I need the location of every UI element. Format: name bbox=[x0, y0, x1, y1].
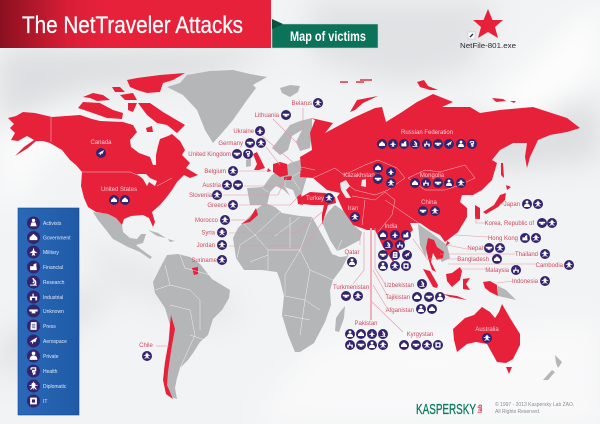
Australia bbox=[453, 304, 520, 363]
marker: Jordan bbox=[197, 220, 324, 250]
marker: Tajikistan: Tajikistan bbox=[385, 295, 410, 301]
marker: Uzbekistan: Uzbekistan bbox=[384, 283, 414, 289]
legend panel: Aerospace bbox=[43, 339, 67, 345]
marker: India: India bbox=[384, 224, 398, 230]
legend panel: Health bbox=[43, 369, 58, 375]
Arctic Canada islands bbox=[78, 73, 185, 133]
marker: China: China bbox=[421, 200, 437, 206]
marker: Slovenia: Slovenia bbox=[189, 193, 213, 199]
Arabia and Iraq bbox=[322, 205, 362, 251]
marker: Austria bbox=[202, 178, 287, 190]
legend panel: Military bbox=[43, 250, 59, 256]
marker: Morocco bbox=[195, 215, 245, 225]
marker: Russian Federation: Russian Federation bbox=[401, 130, 453, 136]
marker: Belarus bbox=[292, 98, 323, 130]
marker: Iran: Iran bbox=[348, 206, 358, 212]
marker: Nepal: Nepal bbox=[467, 246, 483, 252]
legend panel: Industrial bbox=[43, 295, 63, 301]
marker: Turkey: Turkey bbox=[306, 196, 324, 202]
marker: Slovenia bbox=[189, 182, 284, 200]
Canada and United States bbox=[8, 112, 198, 227]
marker: Cambodia: Cambodia bbox=[536, 263, 564, 269]
marker: Ukraine: Ukraine bbox=[233, 129, 255, 135]
marker: Bangladesh bbox=[428, 254, 502, 264]
legend panel: Government bbox=[43, 236, 71, 242]
legend panel bbox=[18, 208, 79, 415]
marker: Greece bbox=[207, 198, 297, 210]
Caspian and Aral seas bbox=[340, 179, 366, 198]
marker: Turkmenistan bbox=[333, 232, 369, 301]
marker: Cambodia bbox=[448, 260, 574, 270]
marker: United Kingdom bbox=[188, 149, 253, 159]
Southeast Asia grey bbox=[418, 224, 516, 300]
marker: Syria bbox=[201, 212, 322, 238]
marker: Japan: Japan bbox=[504, 202, 520, 208]
map of victims ribbon bbox=[272, 19, 378, 48]
legend panel: Unknown bbox=[43, 309, 64, 315]
marker: Morocco: Morocco bbox=[195, 218, 219, 224]
Europe bbox=[247, 160, 310, 205]
map of victims ribbon: Map of victims bbox=[290, 28, 366, 44]
star with file name bbox=[460, 9, 516, 50]
marker: Germany bbox=[218, 138, 280, 165]
Africa bbox=[233, 203, 348, 352]
marker: Qatar bbox=[344, 232, 360, 267]
marker: Kyrgystan: Kyrgystan bbox=[407, 332, 433, 338]
marker: Turkey bbox=[306, 193, 334, 203]
marker: Australia bbox=[475, 327, 499, 343]
Germany, UK and central Europe bbox=[241, 152, 303, 224]
marker: Chile: Chile bbox=[139, 343, 153, 349]
marker: Korea, Republic of: Korea, Republic of bbox=[485, 221, 534, 227]
marker: Hong Kong bbox=[455, 233, 541, 243]
marker: Afganistan bbox=[373, 285, 437, 314]
Arctic Russian islands bbox=[350, 80, 516, 112]
marker: Suriname: Suriname bbox=[191, 258, 218, 264]
marker: Belarus: Belarus bbox=[292, 101, 312, 107]
marker: Malaysia: Malaysia bbox=[485, 268, 510, 274]
Eurasia: Russia, Central Asia, China, India bbox=[300, 94, 580, 262]
marker: Malaysia bbox=[460, 265, 521, 275]
Asian borders bbox=[301, 160, 475, 232]
marker: Greece: Greece bbox=[207, 203, 228, 209]
Greenland bbox=[167, 70, 267, 143]
Madagascar bbox=[335, 306, 345, 332]
marker: Afganistan: Afganistan bbox=[386, 308, 414, 314]
marker: Kyrgystan bbox=[372, 302, 443, 350]
South American borders bbox=[155, 255, 210, 368]
marker: Lithuania bbox=[255, 110, 300, 146]
marker: Suriname bbox=[191, 255, 227, 267]
marker: Mongolia bbox=[410, 173, 466, 188]
marker: Thailand: Thailand bbox=[515, 252, 538, 258]
marker: Kazakhstan bbox=[343, 163, 396, 188]
Kaspersky logo: lab bbox=[478, 404, 484, 413]
legend panel: IT bbox=[43, 399, 47, 405]
African borders bbox=[237, 212, 342, 335]
legend panel: Financial bbox=[43, 265, 63, 271]
star with file name: NetFile-801.exe bbox=[460, 41, 516, 50]
Caribbean bbox=[148, 230, 175, 242]
Turkey, Syria, Jordan bbox=[301, 192, 336, 225]
marker: China bbox=[418, 200, 440, 216]
marker: Bangladesh: Bangladesh bbox=[457, 257, 489, 263]
marker: Jordan: Jordan bbox=[197, 243, 215, 249]
marker: Turkmenistan: Turkmenistan bbox=[333, 285, 369, 291]
Ireland bbox=[246, 158, 251, 167]
Tasmania bbox=[506, 367, 512, 374]
marker: Canada: Canada bbox=[90, 140, 112, 146]
Scandinavia bbox=[272, 118, 312, 155]
marker: Kazakhstan: Kazakhstan bbox=[343, 173, 375, 179]
South America bbox=[153, 254, 230, 399]
New Zealand bbox=[543, 355, 562, 380]
marker: Ukraine bbox=[233, 126, 302, 170]
Chile bbox=[163, 315, 175, 399]
marker: United States bbox=[101, 187, 137, 205]
marker: Belgium bbox=[204, 166, 268, 176]
legend panel: Press bbox=[43, 324, 56, 330]
marker: United Kingdom: United Kingdom bbox=[188, 152, 231, 158]
marker: Japan bbox=[500, 199, 543, 209]
marker: Indonesia bbox=[497, 276, 550, 286]
marker: Germany: Germany bbox=[218, 141, 243, 147]
marker: Canada bbox=[90, 140, 112, 158]
marker: Tajikistan bbox=[373, 270, 445, 302]
copyright: © 1997 - 2013 Kaspersky Lab ZAO. bbox=[495, 402, 574, 408]
legend panel: Private bbox=[43, 354, 59, 360]
title banner: The NetTraveler Attacks bbox=[22, 12, 243, 39]
legend panel: Activists bbox=[43, 221, 62, 227]
Indonesia islands bbox=[423, 267, 498, 300]
world map bbox=[8, 70, 580, 399]
Great Lakes bbox=[137, 174, 157, 186]
marker: India bbox=[378, 224, 412, 271]
copyright: All Rights Reserved. bbox=[495, 409, 540, 415]
title banner bbox=[0, 0, 271, 48]
Mexico and Central America bbox=[93, 212, 152, 259]
legend panel: Research bbox=[43, 280, 65, 286]
Japan and Korea bbox=[475, 163, 511, 219]
Thailand and Malaysia bbox=[426, 238, 450, 272]
marker: Indonesia: Indonesia bbox=[512, 279, 539, 285]
Kaspersky logo: KASPERSKY bbox=[416, 401, 476, 418]
Suriname bbox=[192, 267, 198, 275]
marker: Nepal bbox=[413, 239, 505, 260]
marker: Uzbekistan bbox=[375, 228, 427, 289]
marker: Pakistan bbox=[345, 228, 388, 350]
marker: Korea, Republic of bbox=[476, 217, 557, 228]
marker: Syria: Syria bbox=[201, 230, 216, 236]
marker: Mongolia: Mongolia bbox=[420, 173, 445, 179]
legend panel: Diplomatic bbox=[43, 384, 67, 390]
marker: Pakistan: Pakistan bbox=[354, 321, 378, 327]
marker: Iran bbox=[348, 206, 360, 222]
North American borders bbox=[51, 117, 172, 186]
marker: Australia: Australia bbox=[475, 327, 499, 333]
marker: Austria: Austria bbox=[202, 183, 222, 189]
marker: Lithuania: Lithuania bbox=[255, 113, 280, 119]
marker: Hong Kong: Hong Kong bbox=[488, 236, 518, 242]
marker: Chile bbox=[139, 343, 169, 361]
European borders bbox=[262, 172, 300, 192]
marker: Russian Federation bbox=[377, 130, 477, 149]
marker: Qatar: Qatar bbox=[344, 250, 360, 256]
marker: United States: United States bbox=[101, 187, 137, 193]
marker: Thailand bbox=[440, 249, 550, 259]
Iceland bbox=[280, 85, 300, 97]
country markers bbox=[90, 98, 574, 361]
marker: Belgium: Belgium bbox=[204, 169, 226, 175]
